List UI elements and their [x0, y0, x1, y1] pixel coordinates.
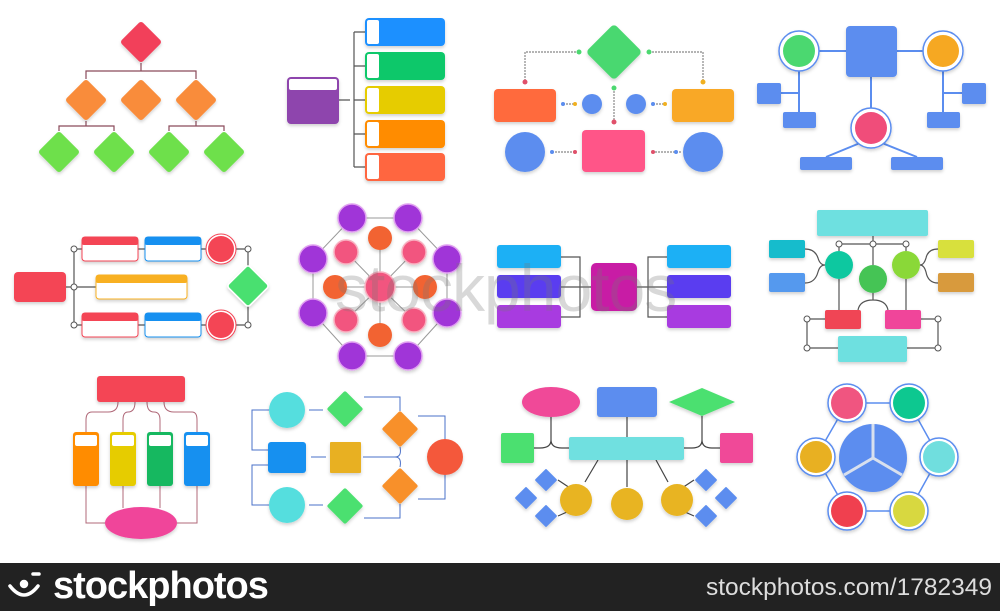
panel: dashed decision flow [494, 24, 734, 172]
panel: mixed shapes flow [501, 387, 753, 527]
panel: green circles flow [769, 210, 974, 362]
panel: column chart flow [73, 376, 210, 539]
panel: pie hexagon [797, 384, 958, 530]
footer bar [0, 563, 1000, 611]
panel: blue hub flow [757, 26, 986, 170]
panel: bracket bars [497, 245, 731, 328]
icon: logo smile [10, 574, 39, 595]
url text: stockphotos.com/1782349 [706, 574, 992, 601]
watermark: stockphotos [335, 251, 676, 325]
logo text: stockphotos [53, 565, 268, 607]
panel: blue arrow flow [252, 391, 463, 524]
panel: bracket list [287, 18, 445, 181]
panel: circle network [299, 204, 461, 370]
panel: header-box flow with diamond [14, 234, 269, 340]
panel: diamond hierarchy [38, 21, 245, 173]
